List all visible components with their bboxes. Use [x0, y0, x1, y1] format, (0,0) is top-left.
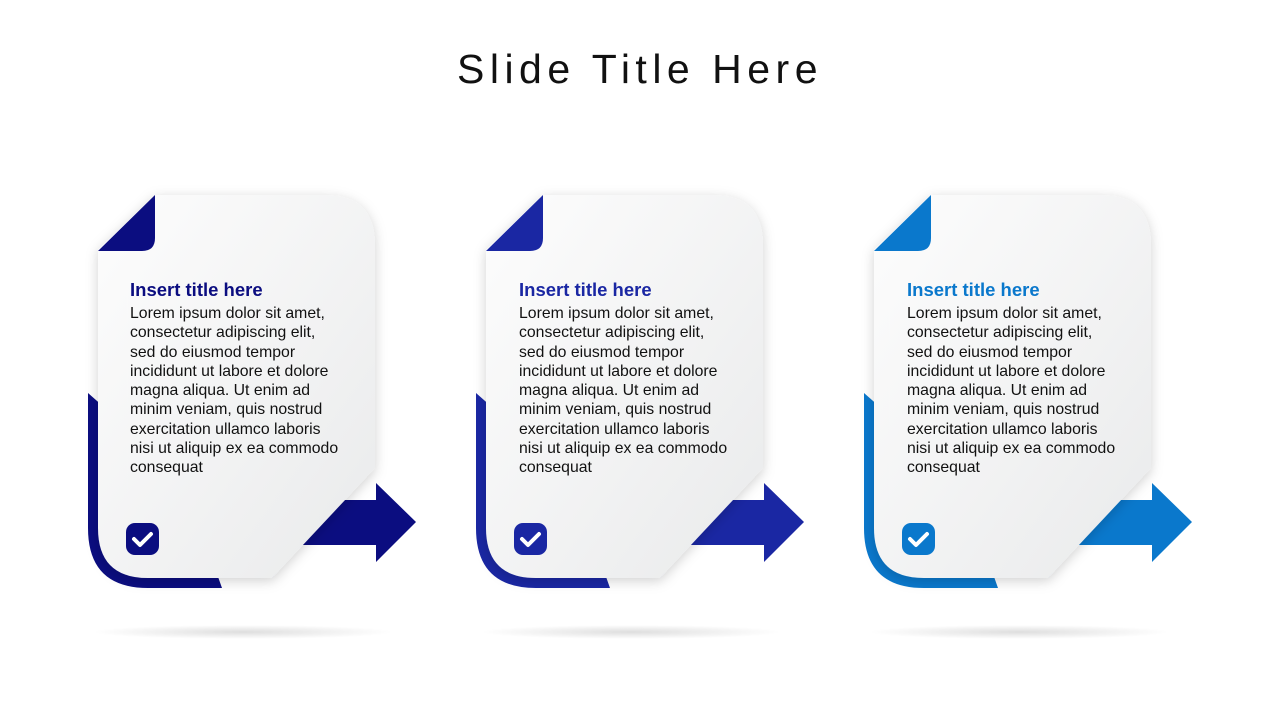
text block 2: Lorem ipsum dolor sit amet,	[519, 305, 714, 322]
text block 3: consequat	[907, 459, 980, 476]
text block 2	[519, 279, 727, 476]
text block 3: consectetur adipiscing elit,	[907, 324, 1092, 341]
text block 2: consequat	[519, 459, 592, 476]
text block 2: Insert title here	[519, 279, 652, 300]
text block 3: Lorem ipsum dolor sit amet,	[907, 305, 1102, 322]
text block 1: minim veniam, quis nostrud	[130, 401, 322, 418]
text block 2: sed do eiusmod tempor	[519, 344, 684, 361]
text block 1: Lorem ipsum dolor sit amet,	[130, 305, 325, 322]
text block 2: incididunt ut labore et dolore	[519, 363, 717, 380]
text block 1: exercitation ullamco laboris	[130, 421, 321, 438]
text block 3: incididunt ut labore et dolore	[907, 363, 1105, 380]
text block 3: exercitation ullamco laboris	[907, 421, 1098, 438]
text block 1: consequat	[130, 459, 203, 476]
text block 2: nisi ut aliquip ex ea commodo	[519, 440, 727, 457]
text block 2: minim veniam, quis nostrud	[519, 401, 711, 418]
title: Slide Title Here	[457, 46, 823, 92]
text block 3: sed do eiusmod tempor	[907, 344, 1072, 361]
text block 1: Insert title here	[130, 279, 263, 300]
text block 1	[130, 279, 338, 476]
text block 3: minim veniam, quis nostrud	[907, 401, 1099, 418]
text block 3	[907, 279, 1115, 476]
text block 1: nisi ut aliquip ex ea commodo	[130, 440, 338, 457]
card 3	[864, 195, 1192, 639]
text block 3: nisi ut aliquip ex ea commodo	[907, 440, 1115, 457]
text block 2: consectetur adipiscing elit,	[519, 324, 704, 341]
text block 1: sed do eiusmod tempor	[130, 344, 295, 361]
text block 2: magna aliqua. Ut enim ad	[519, 382, 699, 399]
text block 2: exercitation ullamco laboris	[519, 421, 710, 438]
text block 3: magna aliqua. Ut enim ad	[907, 382, 1087, 399]
text block 1: magna aliqua. Ut enim ad	[130, 382, 310, 399]
text block 1: consectetur adipiscing elit,	[130, 324, 315, 341]
card 2	[476, 195, 804, 639]
text block 1: incididunt ut labore et dolore	[130, 363, 328, 380]
card 1	[88, 195, 416, 639]
text block 3: Insert title here	[907, 279, 1040, 300]
